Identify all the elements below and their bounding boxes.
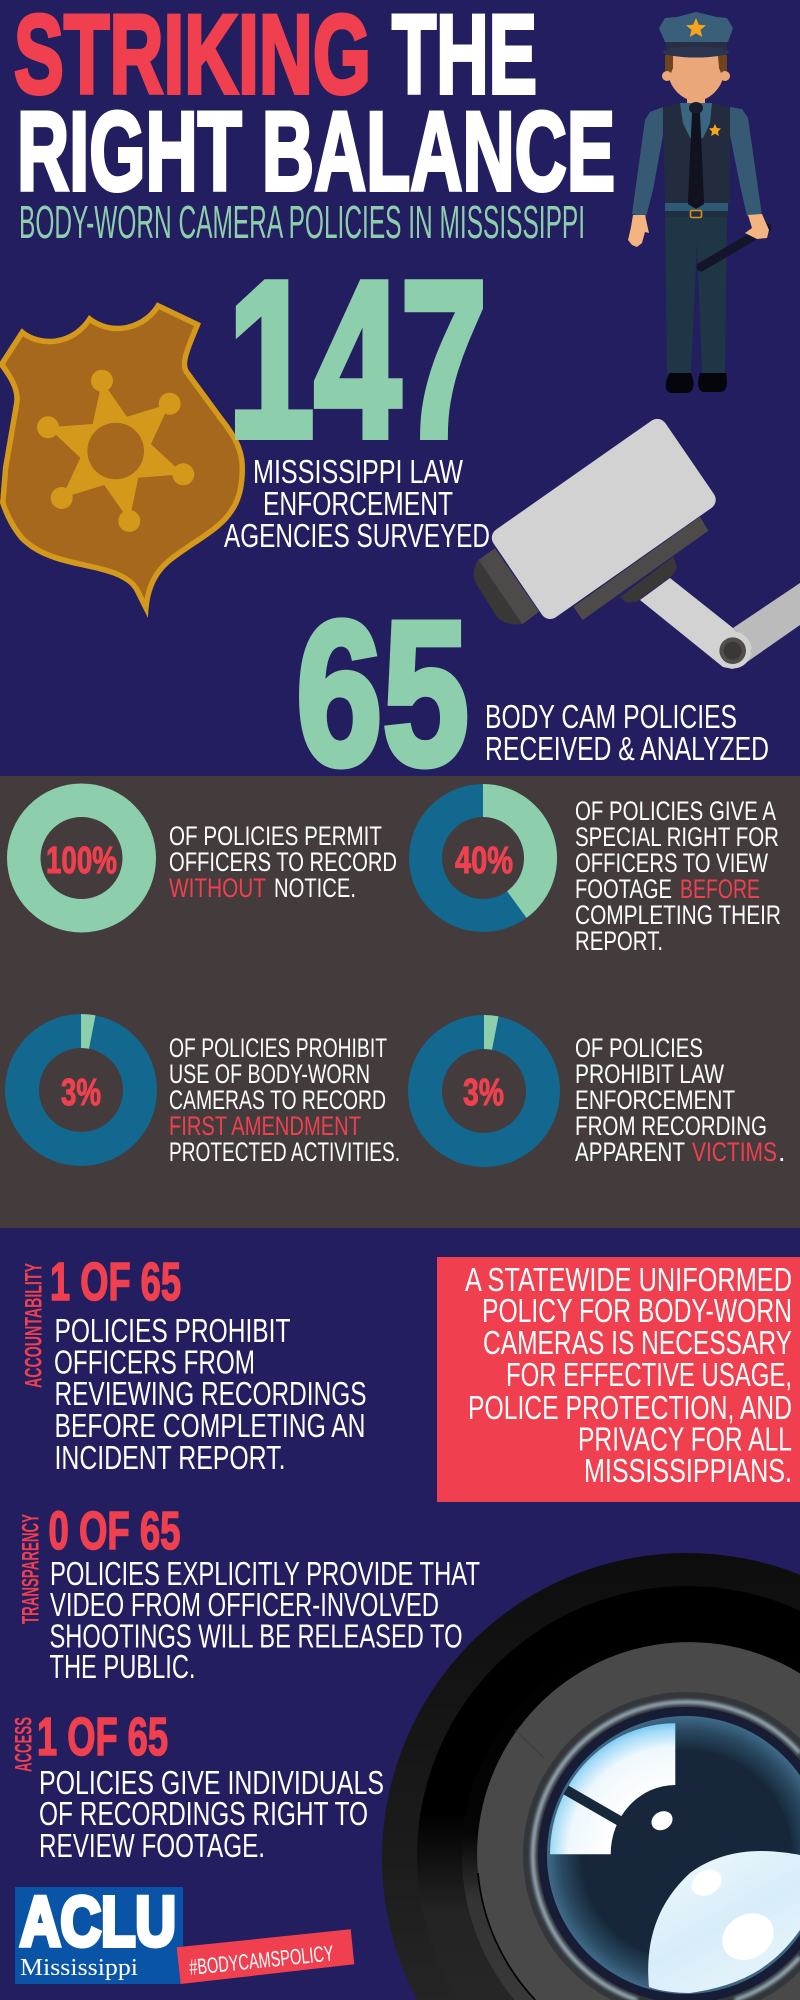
text: prohibit recording first amendment: CAMERAS TO RECORD	[169, 1085, 386, 1115]
text: prohibit reviewing recordings: BEFORE COMPLETING AN	[54, 1407, 366, 1444]
text: prohibit reviewing recordings: POLICIES PROHIBIT	[54, 1312, 290, 1349]
donut chart: 3% first amendment: 3%	[61, 1072, 101, 1114]
icon: camera lens	[382, 1553, 800, 2000]
text: prohibit recording first amendment: FIRST AMENDMENT	[169, 1111, 361, 1141]
text: special right to view footage	[575, 796, 781, 956]
donut chart: 40%	[426, 784, 557, 918]
icon: police officer	[628, 12, 769, 393]
text: special right to view footage: BEFORE	[680, 874, 760, 904]
vertical label: access: ACCESS	[10, 1717, 38, 1772]
text: release of shooting video: SHOOTINGS WILL BE RELEASED TO	[50, 1618, 462, 1654]
text: policies received	[485, 698, 769, 767]
text: prohibit reviewing recordings: INCIDENT REPORT.	[54, 1439, 286, 1476]
text: agencies surveyed	[224, 453, 490, 554]
stat: 1 of 65: 1 OF 65	[37, 1707, 168, 1767]
hashtag label	[177, 1929, 354, 1984]
text: agencies surveyed: ENFORCEMENT	[263, 485, 453, 522]
text: agencies surveyed: MISSISSIPPI LAW	[253, 453, 464, 490]
text: prohibit reviewing recordings	[54, 1312, 366, 1476]
text: release of shooting video: VIDEO FROM OFFICER-INVOLVED	[50, 1586, 439, 1623]
text: prohibit reviewing recordings: OFFICERS FROM	[54, 1344, 255, 1380]
panel: policy statistics	[0, 776, 800, 1228]
section: accountability	[20, 1252, 366, 1476]
logo: ACLU Mississippi: ACLU	[20, 1882, 176, 1960]
stat: 0 of 65: 0 OF 65	[48, 1501, 180, 1561]
stat: 65: 65	[296, 579, 469, 808]
text: prohibit recording victims: PROHIBIT LAW	[575, 1059, 724, 1089]
text: individuals right to review: REVIEW FOOTAGE.	[39, 1827, 265, 1864]
text: permit recording without notice: OF POLICIES PERMIT	[169, 821, 382, 851]
text: prohibit recording first amendment: OF POLICIES PROHIBIT	[169, 1033, 387, 1063]
vertical label: transparency: TRANSPARENCY	[18, 1514, 44, 1624]
text: permit recording without notice	[169, 821, 397, 903]
text: prohibit recording victims: APPARENT	[575, 1137, 685, 1167]
text: permit recording without notice: NOTICE.	[274, 873, 356, 903]
text: special right to view footage: REPORT.	[575, 926, 663, 956]
text: release of shooting video: POLICIES EXPLICITLY PROVIDE THAT	[50, 1555, 480, 1592]
logo: ACLU Mississippi	[15, 1882, 183, 1984]
text: release of shooting video	[50, 1555, 480, 1685]
donut chart: 3% first amendment	[22, 1014, 140, 1149]
stat: 147: 147	[228, 236, 487, 484]
icon: security camera	[474, 429, 800, 669]
text: agencies surveyed: AGENCIES SURVEYED	[224, 517, 490, 554]
text: permit recording without notice: WITHOUT	[169, 873, 266, 903]
donut chart: 3% victims: 3%	[463, 1072, 504, 1114]
text: prohibit recording victims: VICTIMS	[692, 1137, 777, 1167]
section: transparency	[18, 1501, 480, 1685]
donut chart: 40%: 40%	[455, 840, 513, 882]
text: prohibit reviewing recordings: REVIEWING RECORDINGS	[54, 1375, 366, 1412]
text: prohibit recording victims	[575, 1033, 786, 1167]
text: prohibit recording first amendment: USE OF BODY-WORN	[169, 1059, 370, 1089]
text: prohibit recording victims: ENFORCEMENT	[575, 1085, 735, 1115]
text: individuals right to review: POLICIES GIVE INDIVIDUALS	[39, 1764, 384, 1801]
text: release of shooting video: THE PUBLIC.	[50, 1648, 196, 1685]
text: prohibit recording victims: .	[778, 1137, 786, 1167]
vertical label: accountability: ACCOUNTABILITY	[20, 1263, 48, 1388]
callout: statewide policy	[437, 1257, 800, 1502]
text: individuals right to review	[39, 1764, 384, 1864]
text: individuals right to review: OF RECORDINGS RIGHT TO	[39, 1795, 368, 1832]
text: prohibit recording victims: OF POLICIES	[575, 1033, 703, 1063]
hashtag label: #BODYCAMSPOLICY	[188, 1940, 335, 1980]
icon: sheriff badge	[0, 302, 245, 618]
text: special right to view footage: FOOTAGE	[575, 874, 672, 904]
text: prohibit recording first amendment	[169, 1033, 400, 1167]
title	[14, 0, 615, 214]
section: access	[10, 1707, 384, 1864]
text: permit recording without notice: OFFICERS TO RECORD	[169, 847, 397, 877]
donut chart: 100%	[24, 800, 139, 916]
stat: 1 of 65: 1 OF 65	[50, 1252, 181, 1312]
logo: ACLU Mississippi: Mississippi	[20, 1955, 138, 1981]
text: prohibit recording first amendment: PROTECTED ACTIVITIES.	[169, 1137, 400, 1167]
donut chart: 3% victims	[425, 1015, 543, 1150]
donut chart: 100%: 100%	[46, 840, 117, 882]
